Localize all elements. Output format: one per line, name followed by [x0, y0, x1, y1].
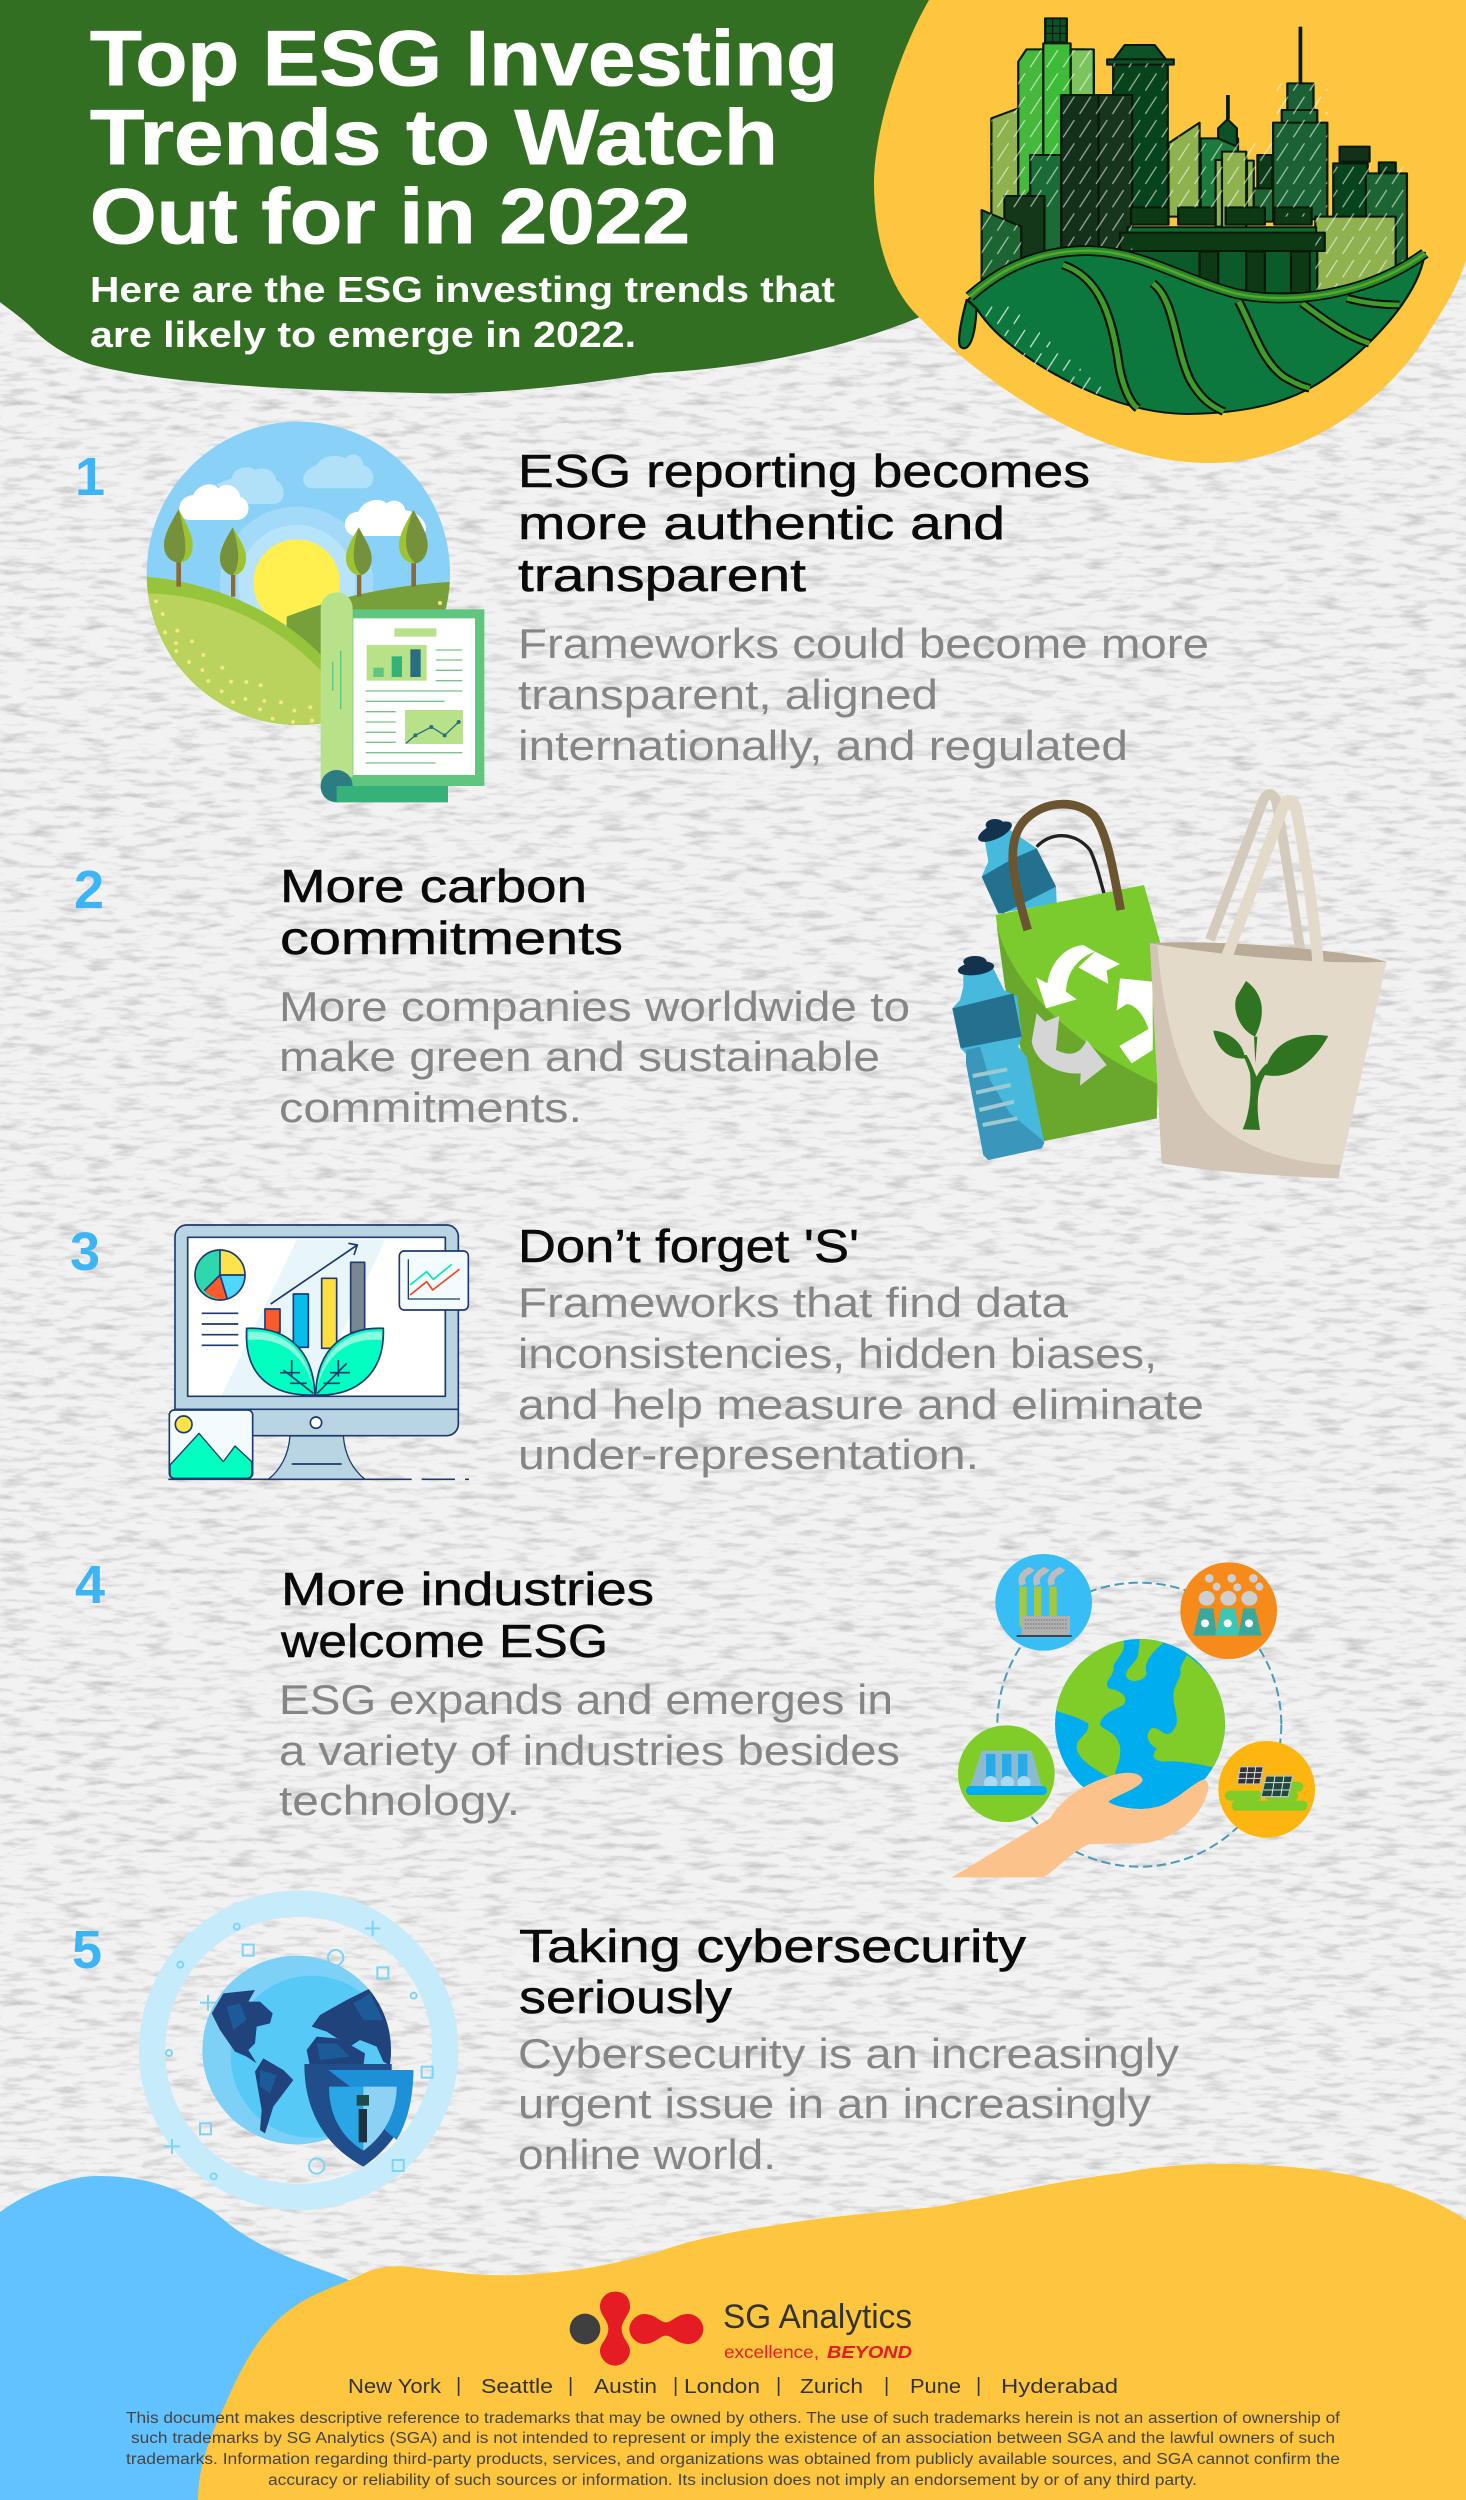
illustration: hand holding globe with energy icons: [952, 1554, 1315, 1877]
title: Top ESG Investing: [90, 14, 838, 102]
number 1: 1: [75, 447, 105, 507]
body 5: Cybersecurity is an increasingly: [518, 2030, 1179, 2077]
heading 5: [519, 1920, 1026, 2023]
body 1: Frameworks could become more: [518, 620, 1209, 667]
office locations: |: [673, 2375, 678, 2397]
illustration: green city on a leaf: [959, 18, 1425, 414]
heading 1: ESG reporting becomes: [518, 445, 1090, 497]
heading 5: Taking cybersecurity: [519, 1920, 1026, 1972]
body 4: ESG expands and emerges in: [279, 1676, 893, 1723]
body 5: urgent issue in an increasingly: [518, 2080, 1151, 2127]
logo: SG Analytics: SG Analytics: [723, 2298, 912, 2336]
office locations: Zurich: [800, 2376, 863, 2398]
heading 1: transparent: [518, 549, 806, 601]
body 4: a variety of industries besides: [279, 1727, 900, 1774]
heading 4: More industries: [281, 1563, 654, 1615]
footer wave: blue: [0, 2176, 370, 2500]
heading 1: more authentic and: [518, 497, 1005, 549]
body 2: make green and sustainable: [279, 1033, 880, 1080]
body 4: technology.: [279, 1777, 520, 1824]
heading 4: [280, 1563, 654, 1667]
office locations: |: [568, 2375, 573, 2397]
body 1: transparent, aligned: [518, 671, 938, 718]
body 1: [518, 620, 1209, 769]
office locations: Hyderabad: [1001, 2376, 1118, 2398]
office locations: Austin: [594, 2376, 657, 2398]
body 5: online world.: [518, 2131, 776, 2178]
heading 4: welcome ESG: [280, 1615, 608, 1667]
office locations: |: [456, 2375, 461, 2397]
heading 1: [518, 445, 1090, 601]
illustration: globe with shield: [152, 1904, 445, 2197]
office locations: Seattle: [481, 2376, 553, 2398]
body 3: Frameworks that find data: [518, 1279, 1069, 1326]
number 3: 3: [70, 1222, 100, 1282]
heading 2: More carbon: [280, 860, 587, 912]
illustration: landscape with report: [143, 422, 484, 802]
office locations: |: [884, 2375, 889, 2397]
header blob: yellow: [874, 0, 1466, 463]
body 2: More companies worldwide to: [279, 983, 910, 1030]
disclaimer: accuracy or reliability of such sources or information. Its inclusion does not imply an endorsement by or of any third party.: [268, 2472, 1197, 2489]
office locations: [348, 2375, 1118, 2398]
disclaimer: [126, 2410, 1341, 2489]
disclaimer: trademarks. Information regarding third-party products, services, and organizations was obtained from publicly available sources, and SGA cannot confirm the: [126, 2451, 1340, 2468]
disclaimer: such trademarks by SG Analytics (SGA) and is not intended to represent or imply the existence of an association between SGA and the lawful owners of such: [131, 2430, 1335, 2447]
body 5: [518, 2030, 1179, 2178]
office locations: Pune: [910, 2376, 961, 2398]
logo: SG Analytics: BEYOND: [827, 2342, 912, 2362]
footer wave: yellow: [198, 2164, 1466, 2500]
office locations: |: [976, 2375, 981, 2397]
body 2: commitments.: [279, 1084, 582, 1131]
logo: SG Analytics: [570, 2292, 912, 2366]
body 2: [279, 983, 910, 1131]
subtitle: [90, 269, 835, 355]
number 2: 2: [74, 860, 104, 920]
subtitle: are likely to emerge in 2022.: [90, 314, 636, 355]
illustration: bottles and bags: [952, 794, 1387, 1178]
body 1: internationally, and regulated: [518, 722, 1128, 769]
body 3: [518, 1279, 1204, 1478]
body 4: [279, 1676, 900, 1824]
body 3: inconsistencies, hidden biases,: [518, 1330, 1157, 1377]
office locations: |: [776, 2375, 781, 2397]
heading 5: seriously: [519, 1971, 732, 2023]
subtitle: Here are the ESG investing trends that: [90, 269, 835, 310]
office locations: London: [684, 2376, 760, 2398]
body 3: and help measure and eliminate: [518, 1381, 1204, 1428]
number 5: 5: [72, 1920, 102, 1980]
illustration: monitor with chart and leaves: [168, 1225, 469, 1479]
heading 3: Don’t forget 'S': [518, 1220, 859, 1272]
header banner: green: [0, 0, 932, 393]
title: Trends to Watch: [90, 93, 778, 181]
title: [90, 14, 838, 260]
disclaimer: This document makes descriptive reference to trademarks that may be owned by others. The use of such trademarks herein is not an assertion of ownership of: [126, 2410, 1341, 2427]
logo: SG Analytics: excellence,: [724, 2342, 819, 2362]
office locations: New York: [348, 2376, 442, 2398]
heading 2: commitments: [280, 912, 623, 964]
number 4: 4: [75, 1555, 105, 1615]
title: Out for in 2022: [90, 172, 690, 260]
heading 2: [280, 860, 623, 964]
body 3: under-representation.: [518, 1431, 979, 1478]
